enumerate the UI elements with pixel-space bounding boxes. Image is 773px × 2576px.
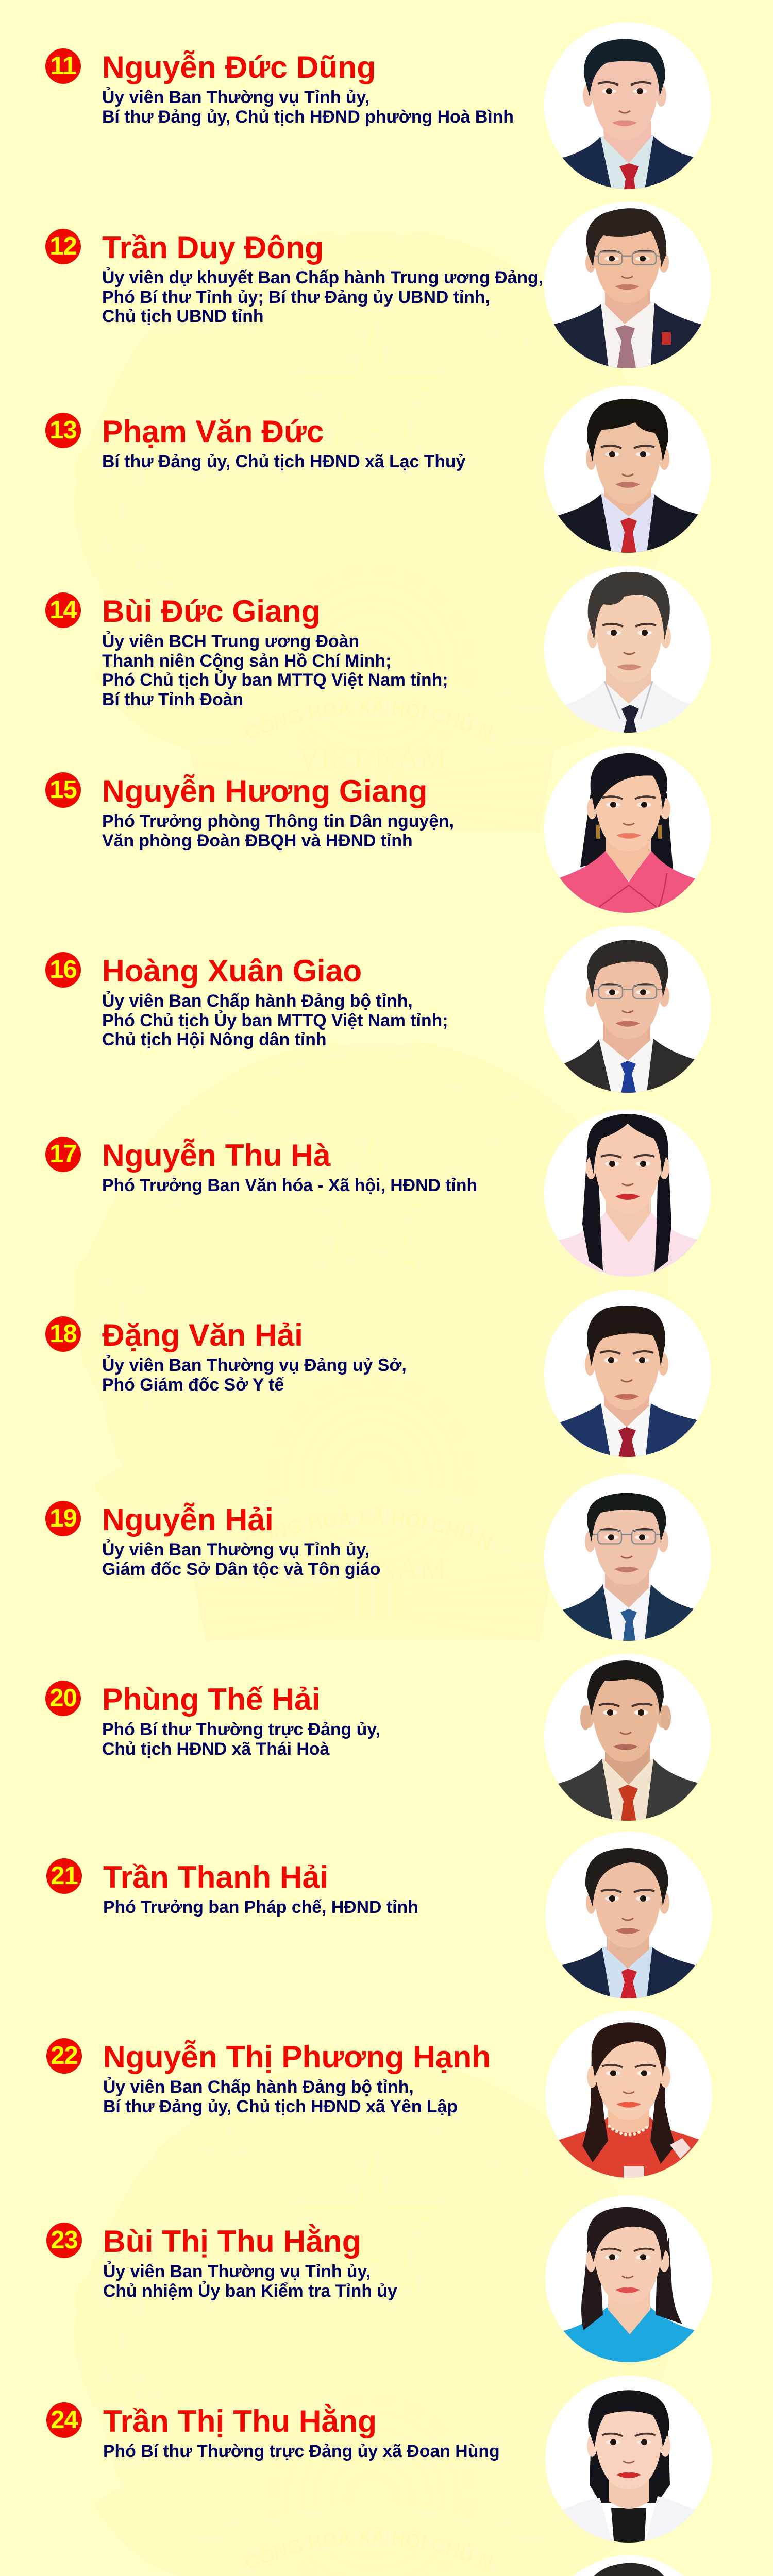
role 19: Ủy viên Ban Thường vụ Tỉnh ủy, [102,1540,369,1560]
portrait 22 [545,2011,712,2178]
role 23 [103,2261,397,2301]
portrait 24 [545,2376,712,2543]
entry 19 [45,1474,711,1641]
badge 20 [45,1681,81,1716]
badge 18 [45,1316,81,1352]
role 20: Chủ tịch HĐND xã Thái Hoà [102,1739,329,1759]
role 15: Phó Trưởng phòng Thông tin Dân nguyện, [102,811,454,831]
badge 17: 17 [49,1140,77,1168]
role 16: Ủy viên Ban Chấp hành Đảng bộ tỉnh, [102,991,413,1011]
portrait 16 [544,926,711,1093]
portrait 17 [544,1110,711,1277]
watermark emblem 1: VIỆT NAM [297,741,447,775]
watermark emblem 1 [76,233,644,833]
role 16: Chủ tịch Hội Nông dân tỉnh [102,1030,327,1049]
badge 14: 14 [49,596,77,624]
badge 11: 11 [51,52,76,80]
role 22 [103,2077,458,2116]
name 16: Hoàng Xuân Giao [102,953,362,988]
entry 21 [46,1832,712,1998]
portrait 19 [544,1474,711,1641]
entry 23 [46,2195,712,2362]
name 12: Trần Duy Đông [102,230,324,265]
badge 16 [45,952,81,988]
portrait 15 [544,746,711,913]
badge 20: 20 [49,1684,77,1712]
watermark emblem 3 [76,2063,648,2576]
badge 13: 13 [49,416,77,444]
name 21: Trần Thanh Hải [103,1859,328,1894]
badge 24 [46,2402,82,2438]
portrait 14 [544,566,711,733]
portrait 11 [544,22,711,189]
name 15: Nguyễn Hương Giang [102,773,427,808]
portrait 18 [544,1290,711,1457]
role 20 [102,1720,380,1759]
portrait 21 [545,1832,712,1998]
role 12: Chủ tịch UBND tỉnh [102,307,264,326]
badge 18: 18 [49,1320,77,1348]
name 14: Bùi Đức Giang [102,594,321,629]
badge 15 [45,772,81,808]
role 15: Văn phòng Đoàn ĐBQH và HĐND tỉnh [102,831,413,851]
badge 16: 16 [49,956,77,984]
role 11: Bí thư Đảng ủy, Chủ tịch HĐND phường Hoà Bình [102,107,514,127]
role 22: Bí thư Đảng ủy, Chủ tịch HĐND xã Yên Lập [103,2097,458,2116]
entry 13 [45,386,711,553]
watermark emblem 2: VIỆT NAM [297,1551,447,1585]
role 14: Bí thư Tỉnh Đoàn [102,690,243,709]
portrait 13 [544,386,711,553]
role 23: Ủy viên Ban Thường vụ Tỉnh ủy, [103,2262,371,2281]
role 22: Ủy viên Ban Chấp hành Đảng bộ tỉnh, [103,2077,414,2097]
badge 23 [46,2223,82,2258]
badge 23: 23 [51,2226,78,2254]
role 12: Phó Bí thư Tỉnh ủy; Bí thư Đảng ủy UBND tỉnh, [102,287,490,307]
role 19 [102,1539,380,1579]
badge 22: 22 [51,2042,78,2070]
entry 15 [45,746,711,913]
badge 22 [46,2038,82,2074]
entry 16 [45,926,711,1093]
role 11 [102,87,514,127]
portrait 20 [544,1654,711,1821]
role 14: Ủy viên BCH Trung ương Đoàn [102,632,359,651]
entry 12 [45,201,711,368]
portrait 25 [545,2555,712,2576]
badge 13 [45,413,81,448]
entry 11 [45,22,711,189]
badge 12 [45,229,81,264]
entry 18 [45,1290,711,1457]
entry 25 [574,2555,683,2576]
role 12 [102,267,543,326]
role 15 [102,811,454,851]
watermark emblem 2 [76,1043,668,1642]
role 16: Phó Chủ tịch Ủy ban MTTQ Việt Nam tỉnh; [102,1011,448,1030]
role 23: Chủ nhiệm Ủy ban Kiểm tra Tỉnh ủy [103,2281,397,2301]
role 16 [102,991,448,1049]
badge 24: 24 [51,2406,78,2434]
role 19: Giám đốc Sở Dân tộc và Tôn giáo [102,1560,380,1579]
role 17: Phó Trưởng Ban Văn hóa - Xã hội, HĐND tỉnh [102,1176,477,1195]
portrait 12 [544,201,711,368]
entry 20 [45,1654,711,1821]
role 11: Ủy viên Ban Thường vụ Tỉnh ủy, [102,88,369,107]
name 23: Bùi Thị Thu Hằng [103,2224,361,2259]
name 24: Trần Thị Thu Hằng [103,2403,377,2438]
name 17: Nguyễn Thu Hà [102,1138,331,1173]
name 18: Đặng Văn Hải [102,1317,303,1352]
entry 17 [45,1110,711,1277]
role 14 [102,631,448,709]
role 13: Bí thư Đảng ủy, Chủ tịch HĐND xã Lạc Thuỷ [102,452,465,471]
badge 15: 15 [49,776,77,804]
badge 21: 21 [51,1862,78,1890]
name 13: Phạm Văn Đức [102,414,324,449]
name 22: Nguyễn Thị Phương Hạnh [103,2039,491,2074]
badge 19: 19 [49,1504,77,1532]
badge 11 [45,48,81,84]
role 24: Phó Bí thư Thường trực Đảng ủy xã Đoan Hùng [103,2442,500,2461]
role 14: Thanh niên Cộng sản Hồ Chí Minh; [102,651,391,671]
role 18: Ủy viên Ban Thường vụ Đảng uỷ Sở, [102,1355,407,1375]
role 12: Ủy viên dự khuyết Ban Chấp hành Trung ương Đảng, [102,268,543,287]
entry 14 [45,566,711,733]
entry 22 [46,2011,712,2178]
role 18: Phó Giám đốc Sở Y tế [102,1375,284,1395]
badge 19 [45,1501,81,1536]
badge 14 [45,592,81,628]
name 20: Phùng Thế Hải [102,1682,321,1717]
badge 17 [45,1137,81,1172]
role 14: Phó Chủ tịch Ủy ban MTTQ Việt Nam tỉnh; [102,670,448,690]
role 21: Phó Trưởng ban Pháp chế, HĐND tỉnh [103,1897,418,1917]
name 11: Nguyễn Đức Dũng [102,49,376,84]
role 20: Phó Bí thư Thường trực Đảng ủy, [102,1720,380,1739]
badge 12: 12 [49,232,77,260]
name 19: Nguyễn Hải [102,1502,274,1537]
portrait 23 [545,2195,712,2362]
entry 24 [46,2376,712,2543]
role 18 [102,1355,407,1395]
badge 21 [46,1858,82,1894]
